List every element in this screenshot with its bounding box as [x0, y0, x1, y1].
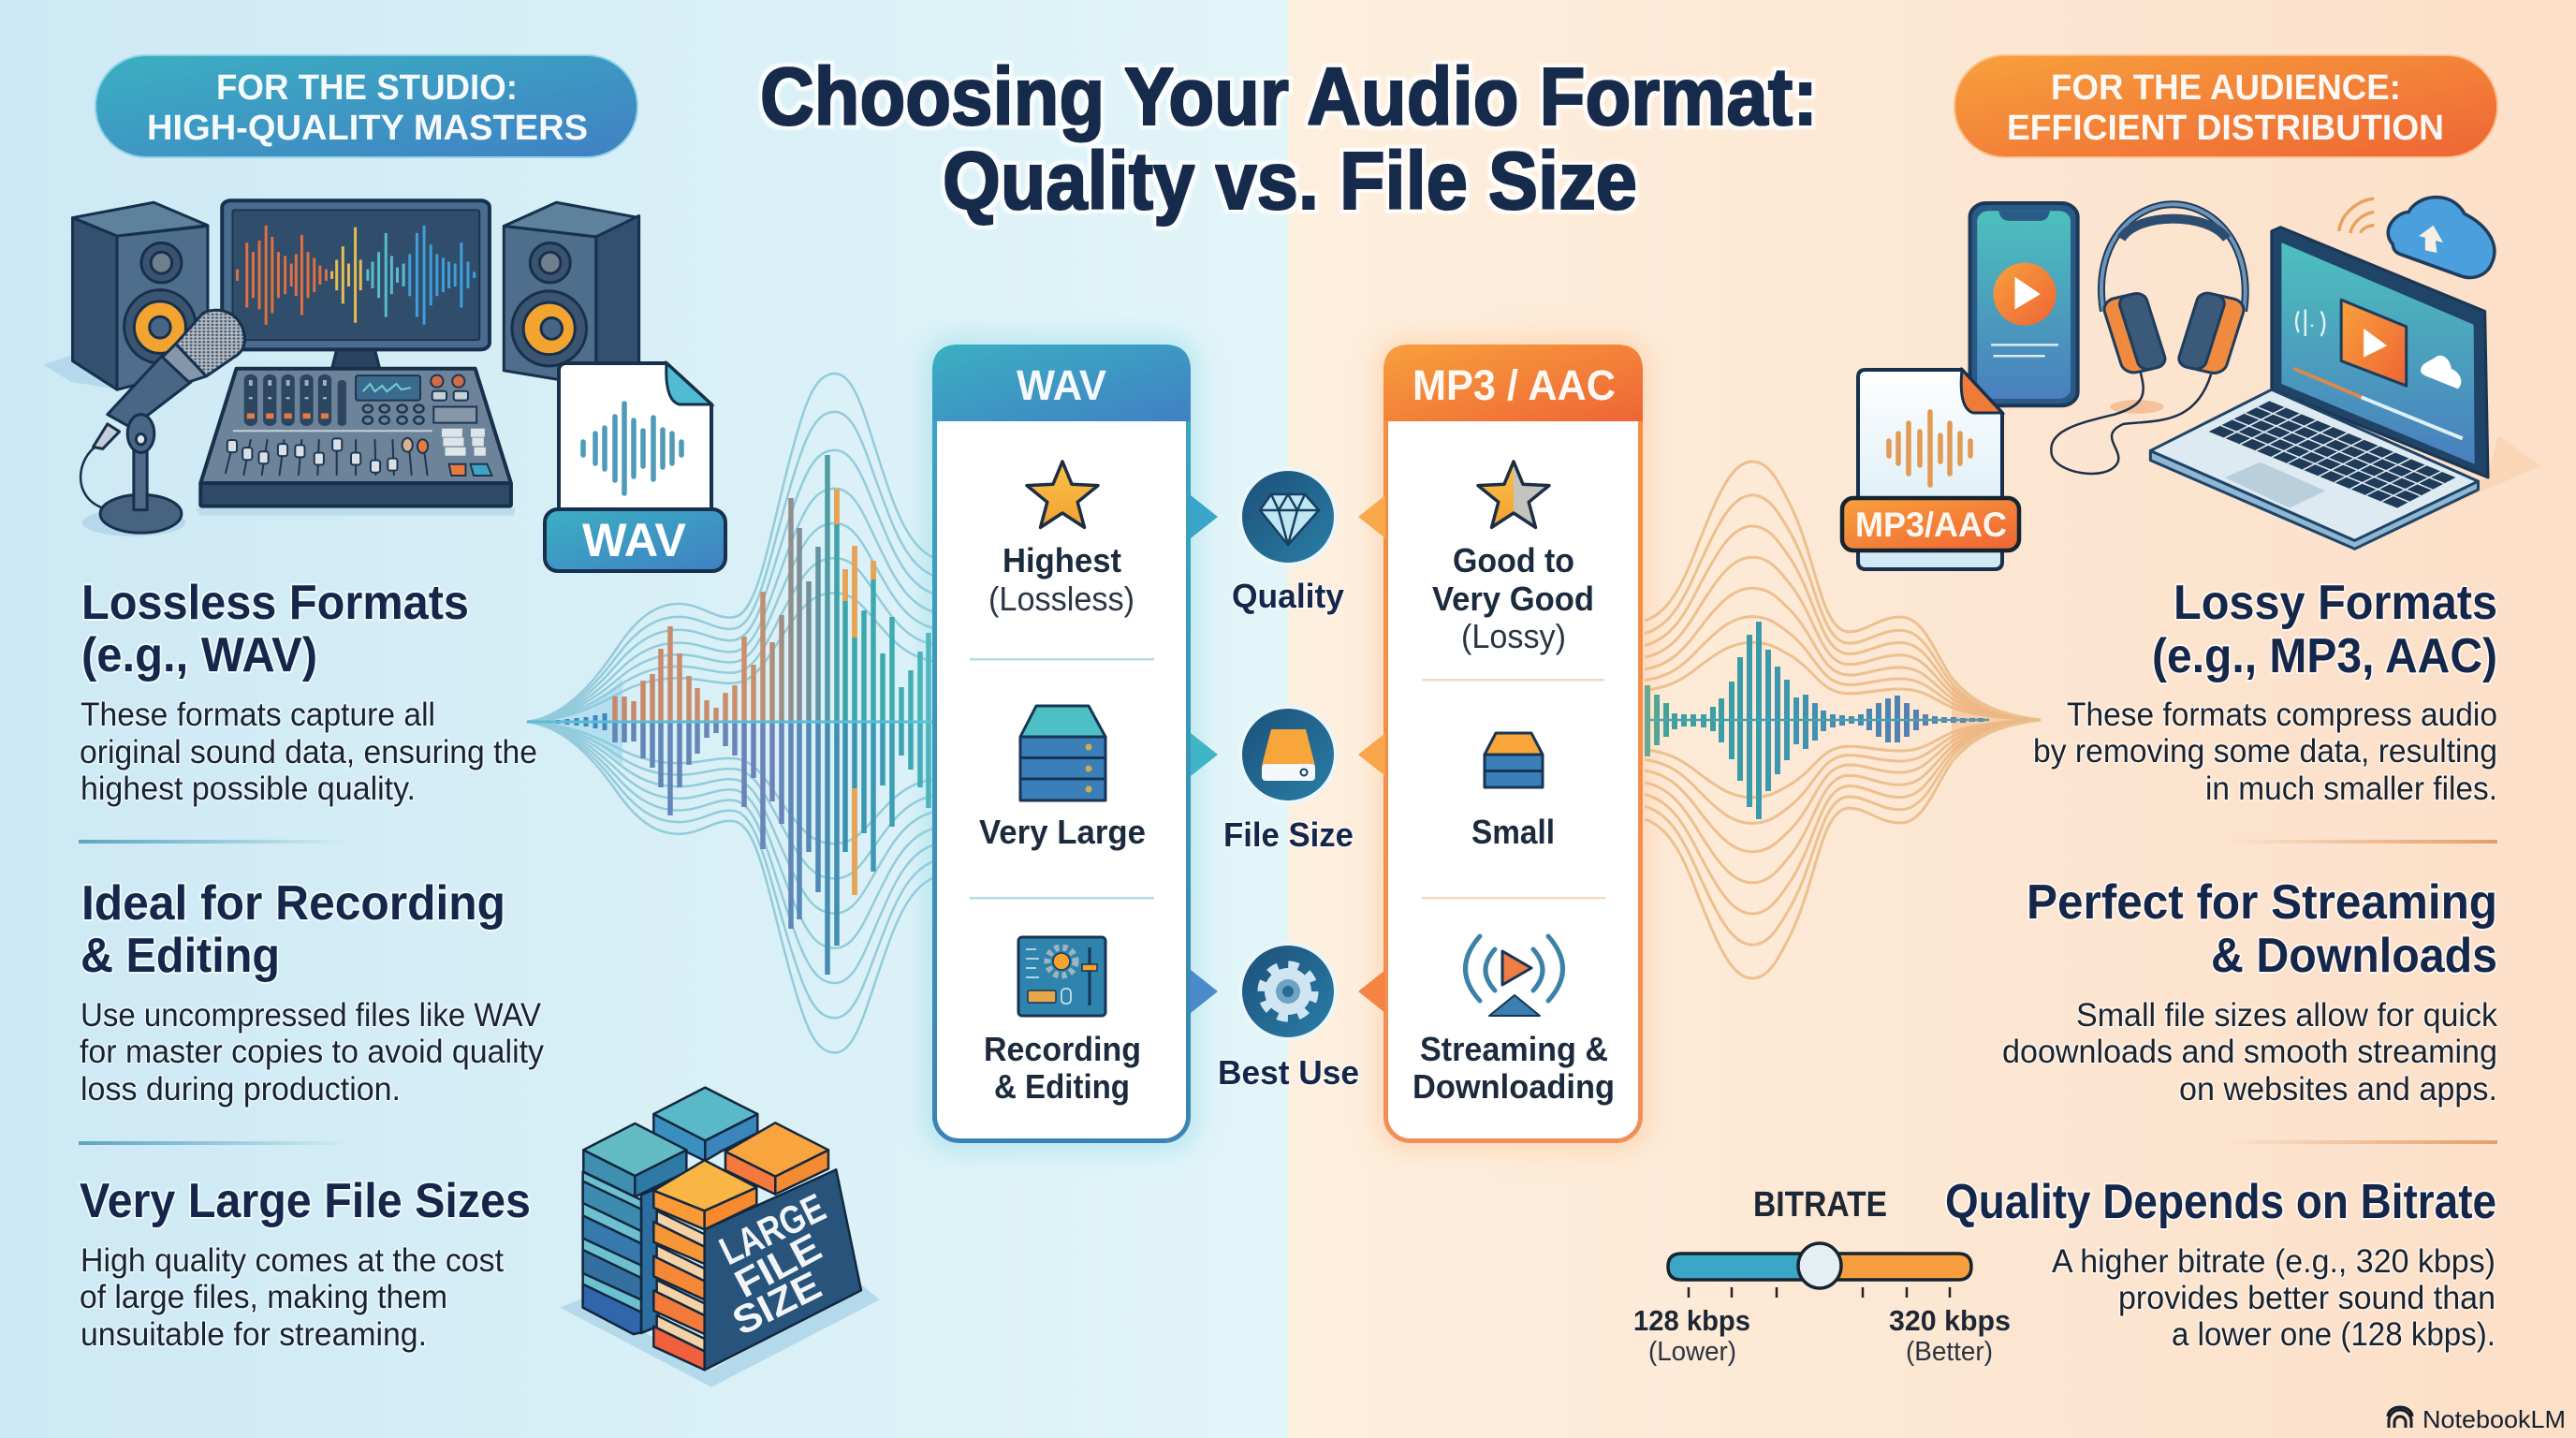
text block: lossy formats: by removing some data, resulting	[2033, 733, 2497, 770]
cell: quality WAV: (Lossless)	[988, 580, 1134, 618]
cell: file size WAV: Very Large	[979, 813, 1146, 851]
cell: quality WAV	[988, 541, 1134, 618]
text block: ideal for recording: for master copies to avoid quality	[80, 1034, 544, 1070]
text block: quality depends on bitrate: a lower one (128 kbps).	[2172, 1316, 2496, 1353]
illustration: large file size stack: FILE	[727, 1225, 828, 1306]
bitrate slider: 320 kbps	[1889, 1304, 2011, 1337]
row: file size: File Size	[1223, 815, 1354, 854]
microphone	[80, 310, 244, 533]
text block: quality depends on bitrate: A higher bitrate (e.g., 320 kbps)	[2052, 1243, 2496, 1280]
text block: ideal for recording	[80, 876, 544, 1108]
illustration: recording studio	[43, 200, 639, 536]
row: file size	[1223, 707, 1354, 854]
text block: quality depends on bitrate	[1945, 1175, 2496, 1353]
panel: MP3 / AAC column	[1374, 335, 1652, 1152]
panel header: MP3 / AAC	[1383, 345, 1643, 421]
illustration: large file size stack: SIZE	[725, 1263, 828, 1343]
cell: best use MP3: Streaming &	[1420, 1030, 1608, 1068]
text block: lossless formats: Lossless Formats	[81, 576, 469, 630]
text block: very large file sizes: High quality comes at the cost	[80, 1242, 504, 1279]
right speaker	[504, 202, 639, 389]
text block: perfect for streaming	[2002, 875, 2497, 1108]
bitrate slider: (Lower)	[1648, 1337, 1736, 1367]
pill: for the studio: HIGH-QUALITY MASTERS	[147, 109, 588, 148]
text block: lossless formats	[80, 576, 537, 807]
soundwave: lossless (detailed)	[527, 374, 934, 1052]
cell: quality MP3	[1432, 541, 1594, 655]
text block: lossy formats: Lossy Formats	[2174, 576, 2497, 630]
text block: very large file sizes: unsuitable for streaming.	[80, 1316, 427, 1353]
illustration: large file size stack: LARGE	[712, 1185, 832, 1273]
text block: perfect for streaming: & Downloads	[2211, 929, 2497, 983]
text block: perfect for streaming: doownloads and smooth streaming	[2002, 1034, 2497, 1070]
icon: MP3/AAC file	[1842, 370, 2019, 569]
arrow markers: WAV side	[1191, 495, 1218, 1013]
cloud upload	[2388, 198, 2495, 277]
pill: for the audience: FOR THE AUDIENCE:	[2051, 68, 2401, 108]
background: studio side	[0, 0, 1288, 1438]
row: quality: Quality	[1232, 577, 1344, 615]
text block: lossless formats: (e.g., WAV)	[81, 628, 317, 682]
cell: quality MP3: (Lossy)	[1461, 617, 1566, 655]
pill: for the audience: EFFICIENT DISTRIBUTION	[2007, 109, 2444, 148]
icon: diamond	[1260, 494, 1319, 545]
row: best use	[1218, 944, 1359, 1092]
text block: perfect for streaming: Perfect for Streaming	[2027, 875, 2497, 930]
icon: half star	[1478, 462, 1549, 527]
text block: quality depends on bitrate: provides better sound than	[2118, 1280, 2496, 1316]
text block: lossless formats: highest possible quality.	[80, 770, 416, 807]
row: quality	[1232, 469, 1344, 615]
icon: streaming	[1466, 936, 1563, 1016]
illustration: large file size stack	[560, 1088, 880, 1387]
cell: best use MP3: Downloading	[1412, 1067, 1615, 1106]
icon: large server	[1020, 706, 1105, 800]
soundwave: lossy (simplified)	[1645, 462, 2041, 978]
background: audience side	[1288, 0, 2576, 1438]
text block: ideal for recording: Use uncompressed files like WAV	[80, 997, 542, 1034]
bitrate slider: (Better)	[1906, 1337, 1993, 1367]
panel header: WAV	[932, 345, 1191, 421]
icon: WAV file	[545, 363, 725, 571]
laptop	[2150, 227, 2488, 549]
bitrate slider	[1633, 1185, 2011, 1367]
text block: lossy formats: These formats compress audio	[2067, 697, 2497, 733]
pill: for the audience	[1954, 55, 2497, 157]
text block: perfect for streaming: on websites and apps.	[2179, 1071, 2497, 1108]
left speaker	[73, 202, 208, 389]
phone	[1970, 203, 2078, 405]
icon: mixer board	[1018, 937, 1105, 1016]
cell: best use WAV	[984, 1030, 1141, 1106]
text block: ideal for recording: & Editing	[80, 929, 280, 983]
text block: ideal for recording: loss during production.	[80, 1071, 401, 1108]
cell: best use MP3	[1412, 1030, 1615, 1106]
title	[760, 51, 1818, 227]
illustration: devices for listening	[1970, 198, 2541, 550]
mixing console	[200, 369, 511, 506]
text block: very large file sizes: Very Large File Sizes	[80, 1174, 531, 1228]
cell: quality MP3: Very Good	[1432, 580, 1594, 618]
panel header: MP3 / AAC: MP3 / AAC	[1412, 361, 1616, 409]
text block: lossless formats: These formats capture all	[80, 697, 435, 733]
title: Choosing Your Audio Format:	[760, 51, 1818, 142]
text block: ideal for recording: Ideal for Recording	[81, 876, 505, 931]
text block: lossy formats: in much smaller files.	[2205, 770, 2497, 807]
headphones	[2051, 204, 2247, 474]
icon: gold star	[1027, 462, 1098, 527]
text block: perfect for streaming: Small file sizes allow for quick	[2076, 997, 2497, 1034]
cell: file size MP3: Small	[1471, 813, 1555, 851]
icon: gear	[1262, 965, 1314, 1018]
cell: best use WAV: Recording	[984, 1030, 1141, 1068]
bitrate slider: 128 kbps	[1633, 1304, 1750, 1337]
text block: lossless formats: original sound data, ensuring the	[80, 734, 537, 770]
text block: lossy formats	[2033, 576, 2497, 807]
icon: WAV file: WAV	[582, 514, 687, 566]
panel header: WAV: WAV	[1017, 361, 1106, 409]
monitor	[222, 200, 490, 369]
pill: for the studio	[95, 55, 637, 157]
wifi arcs	[2339, 198, 2374, 233]
cell: best use WAV: & Editing	[994, 1067, 1130, 1106]
text block: very large file sizes	[80, 1174, 531, 1353]
text block: very large file sizes: of large files, making them	[80, 1279, 447, 1315]
panel: WAV column	[923, 335, 1200, 1152]
text block: lossy formats: (e.g., MP3, AAC)	[2152, 629, 2497, 683]
logo: NotebookLM: NotebookLM	[2422, 1405, 2566, 1433]
row: best use: Best Use	[1218, 1053, 1359, 1092]
bitrate slider: BITRATE	[1753, 1185, 1887, 1225]
icon: MP3/AAC file: MP3/AAC	[1855, 506, 2007, 544]
icon: drive	[1262, 729, 1315, 781]
cell: quality WAV: Highest	[1003, 541, 1121, 580]
text block: quality depends on bitrate: Quality Depends on Bitrate	[1945, 1175, 2496, 1229]
cell: quality MP3: Good to	[1453, 541, 1574, 580]
pill: for the studio: FOR THE STUDIO:	[216, 68, 518, 108]
title: Quality vs. File Size	[943, 136, 1637, 227]
icon: small server	[1485, 733, 1543, 787]
arrow markers: MP3 side	[1358, 495, 1385, 1013]
